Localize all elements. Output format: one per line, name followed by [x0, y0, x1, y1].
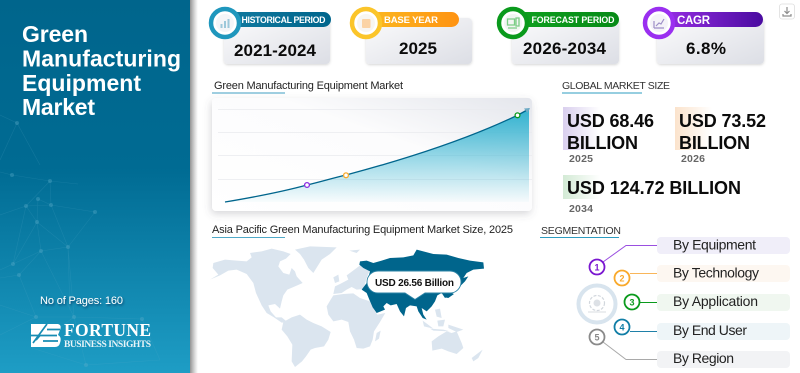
network pattern: [0, 115, 160, 365]
segment: By Technology: [614, 264, 790, 286]
segment: By Region: [590, 330, 790, 368]
stat: CAGR: [645, 9, 764, 64]
sidebar shadow: [190, 0, 198, 373]
stat: 2025 market size: BILLION: [567, 133, 638, 153]
logo: Fortune Business Insights: FORTUNE: [64, 320, 151, 340]
stat: 2025 market size: USD 68.46: [567, 111, 654, 131]
segment: By Technology: 2: [619, 274, 625, 284]
stat: 2026 market size: [675, 107, 766, 165]
title: Manufacturing: [22, 46, 181, 72]
stat: 2026 market size: USD 73.52: [679, 111, 766, 131]
stat: CAGR: 6.8%: [686, 39, 726, 58]
stat: forecast period: 2026-2034: [523, 39, 607, 58]
segment: By End User: By End User: [673, 322, 747, 338]
chart: market growth: [212, 98, 532, 211]
heading: segmentation: SEGMENTATION: [541, 225, 621, 237]
segment: By Region: By Region: [673, 350, 734, 366]
callout: Asia Pacific value: [367, 271, 461, 300]
segmentation diagram: [578, 236, 790, 368]
stat: historical period: [211, 9, 331, 64]
area under curve: [225, 108, 529, 202]
segment: By Application: 3: [629, 298, 635, 308]
segment: By Application: [624, 293, 790, 311]
stat: base year: BASE YEAR: [384, 15, 438, 26]
segment: By Application: By Application: [673, 293, 758, 309]
segment: By Equipment: By Equipment: [673, 236, 756, 252]
stat: 2034 market size: USD 124.72 BILLION: [567, 178, 741, 198]
region: Asia Pacific: [359, 250, 484, 320]
stat: 2025 market size: [563, 107, 654, 165]
segment: By End User: [614, 320, 790, 340]
logo: Fortune Business Insights: [31, 320, 151, 350]
heading: Asia Pacific: Asia Pacific Green Manufacturing Equipment Market Size, 2025: [212, 224, 513, 236]
growth line: [225, 109, 529, 202]
stat: historical period: HISTORICAL PERIOD: [242, 15, 326, 25]
stat: 2026 market size: BILLION: [679, 133, 750, 153]
stat: 2025 market size: 2025: [569, 153, 593, 165]
pages count: No of Pages: 160: [40, 295, 123, 307]
title: [22, 21, 181, 120]
data points: [305, 113, 520, 187]
hub icon: [578, 286, 616, 322]
segment: By Region: 5: [594, 332, 600, 342]
title: Green: [22, 21, 88, 47]
stat: base year: [352, 9, 472, 64]
stat: 2034 market size: [563, 175, 741, 215]
panel: sidebar: [0, 0, 190, 373]
title: Market: [22, 94, 95, 120]
icon: download: [780, 4, 794, 19]
segment: By Technology: By Technology: [673, 264, 759, 280]
segment: By End User: 4: [619, 322, 625, 332]
callout: Asia Pacific value: USD 26.56 Billion: [375, 278, 454, 289]
heading: global market size: GLOBAL MARKET SIZE: [562, 80, 670, 92]
stat: 2034 market size: 2034: [569, 203, 593, 215]
segment: By Equipment: [590, 236, 790, 274]
stat: historical period: 2021-2024: [234, 41, 317, 60]
connectors: [603, 246, 657, 360]
world map: [210, 246, 484, 367]
logo: Fortune Business Insights: BUSINESS INSIGHTS: [64, 340, 151, 350]
stat: 2026 market size: 2026: [681, 153, 705, 165]
segment: By Equipment: 1: [594, 262, 600, 272]
stat: CAGR: CAGR: [677, 15, 711, 27]
heading: market chart: Green Manufacturing Equipment Market: [214, 80, 403, 92]
stat: base year: 2025: [399, 39, 437, 58]
title: Equipment: [22, 70, 141, 96]
stat: forecast period: FORECAST PERIOD: [532, 15, 614, 25]
Japan: [445, 293, 454, 298]
stat: forecast period: [499, 9, 619, 64]
light regions: [210, 246, 483, 367]
